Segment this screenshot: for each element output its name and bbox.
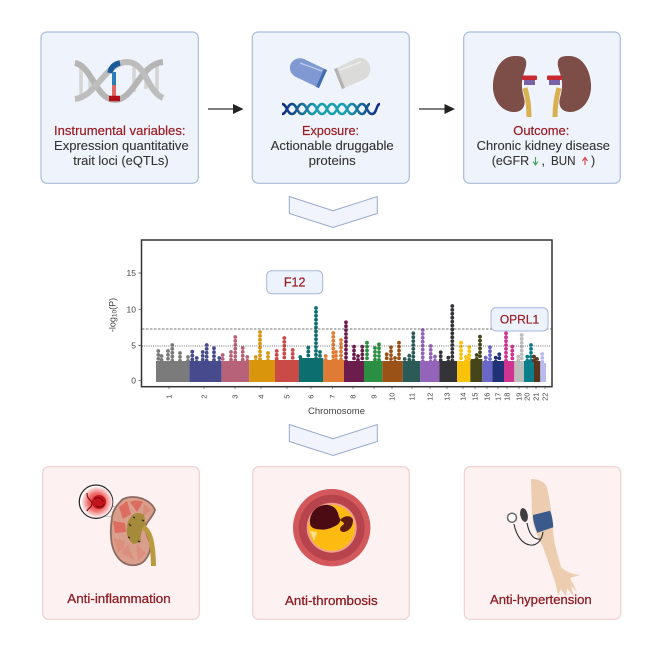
y axis: 0 [131, 376, 136, 386]
panel: anti-hypertension [464, 467, 621, 619]
x axis chromosome labels: 1 [164, 395, 174, 399]
x axis chromosome labels: Chromosome [308, 406, 365, 417]
x axis chromosome labels: 11 [408, 393, 416, 401]
text: expression quantitative: Expression quantitative [54, 139, 189, 153]
x axis chromosome labels: 16 [482, 393, 492, 401]
arrow: exposure to outcome [419, 104, 455, 114]
label: anti-thrombosis: Anti-thrombosis [285, 594, 378, 608]
label: anti-hypertension: Anti-hypertension [490, 593, 592, 607]
y axis: (P) [108, 298, 118, 310]
x axis chromosome labels: 21 [532, 393, 540, 401]
callout: OPRL1 [491, 308, 548, 331]
y axis: -log [108, 317, 118, 332]
text: trait loci: trait loci (eQTLs) [73, 154, 169, 168]
callout: F12 [267, 271, 323, 294]
panel: exposure [252, 32, 409, 183]
heading: outcome: Outcome: [513, 124, 569, 138]
text: BUN: BUN [551, 154, 576, 168]
text: closing bracket: ) [591, 154, 595, 168]
x axis chromosome labels: 12 [426, 393, 434, 401]
callout: OPRL1: OPRL1 [500, 312, 539, 326]
icon: red up arrow [582, 158, 588, 165]
x axis chromosome labels: 15 [470, 393, 480, 401]
y axis: 15 [127, 268, 136, 278]
chart: Manhattan plot [108, 240, 552, 417]
panel: outcome [464, 32, 620, 183]
heading: exposure: Exposure: [302, 124, 359, 138]
x axis chromosome labels: 19 [514, 393, 524, 401]
arrow: instruments to exposure [208, 104, 244, 114]
callout: F12: F12 [284, 276, 306, 290]
icon: double helix strand [282, 104, 380, 114]
text: actionable druggable: Actionable druggable [271, 139, 394, 153]
x axis chromosome labels: 8 [348, 395, 358, 399]
x axis chromosome labels: 20 [522, 393, 532, 401]
heading: instrumental variables: Instrumental variables: [54, 124, 186, 138]
x axis chromosome labels: 17 [494, 393, 502, 401]
text: comma: , [542, 154, 545, 168]
y axis: 10 [127, 305, 136, 315]
x axis chromosome labels: 9 [370, 395, 378, 399]
x axis chromosome labels: 2 [200, 395, 208, 399]
panel: anti-inflammation [43, 467, 199, 619]
y axis: 10 [112, 309, 118, 317]
icon: inflamed kidney with magnified glomerulus [79, 485, 155, 566]
arrow: chevron to Manhattan plot [289, 196, 377, 228]
icon: pair of kidneys [493, 56, 591, 117]
chart: significant SNP points [158, 306, 542, 364]
chart: chromosome bars [156, 358, 546, 382]
y axis [108, 268, 141, 386]
x axis chromosome labels: 5 [282, 395, 292, 399]
icon: artery cross-section with thrombus [293, 489, 370, 566]
x axis chromosome labels: 18 [502, 393, 512, 401]
x axis chromosome labels [164, 387, 550, 417]
y axis: 5 [131, 340, 136, 350]
x axis chromosome labels: 22 [540, 393, 550, 401]
icon: arm with blood pressure cuff [508, 479, 580, 597]
icon: DNA helix with highlighted base pair [75, 62, 163, 100]
text: proteins: proteins [309, 154, 356, 168]
x axis chromosome labels: 14 [458, 393, 468, 401]
panel: anti-thrombosis [253, 467, 409, 619]
text: eGFR: (eGFR [492, 154, 529, 168]
arrow: chevron to therapeutic effects [289, 424, 377, 456]
x axis chromosome labels: 6 [306, 395, 316, 399]
x axis chromosome labels: 3 [230, 395, 240, 399]
x axis chromosome labels: 7 [328, 395, 337, 399]
icon: green down arrow [533, 157, 538, 165]
icon: grey capsule half [334, 58, 370, 89]
text: chronic kidney disease: Chronic kidney disease [477, 139, 610, 153]
x axis chromosome labels: 10 [388, 393, 396, 401]
panel: instrumental variables [41, 32, 198, 183]
icon: blue capsule half [290, 58, 327, 88]
x axis chromosome labels: 4 [256, 395, 266, 399]
x axis chromosome labels: 13 [442, 393, 452, 401]
label: anti-inflammation: Anti-inflammation [67, 592, 171, 606]
